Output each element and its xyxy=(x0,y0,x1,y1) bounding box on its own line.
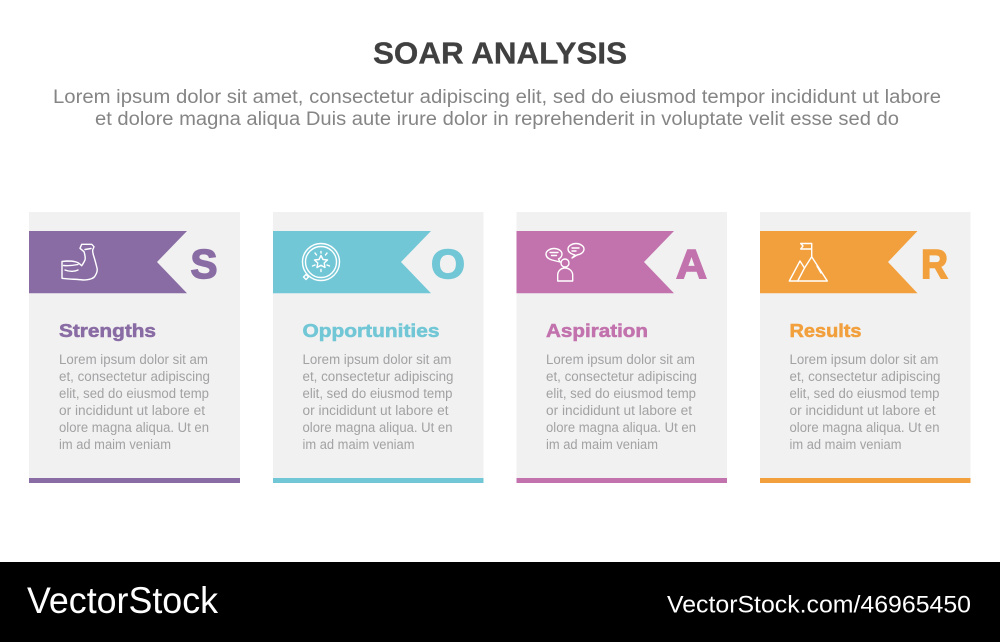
body text: opportunities: et, consectetur adipiscing xyxy=(302,369,454,384)
body text: results: olore magna aliqua. Ut en xyxy=(790,420,940,435)
ribbon: aspiration xyxy=(516,231,674,293)
body text: strengths: elit, sed do eiusmod temp xyxy=(59,386,209,401)
heading: aspiration: Aspiration xyxy=(546,320,648,341)
body text: results: im ad maim veniam xyxy=(790,437,902,452)
body text: strengths xyxy=(59,352,210,452)
ribbon: opportunities xyxy=(273,231,431,293)
heading: results: Results xyxy=(790,320,862,341)
body text: aspiration: Lorem ipsum dolor sit am xyxy=(546,352,695,367)
body text: aspiration: elit, sed do eiusmod temp xyxy=(546,386,696,401)
icon: person with speech bubbles xyxy=(546,244,584,281)
footer bar xyxy=(0,562,1000,642)
subtitle text: et dolore magna aliqua Duis aute irure dolor in reprehenderit in voluptate velit esse sed do xyxy=(95,109,899,130)
body text: strengths: or incididunt ut labore et xyxy=(59,403,205,418)
body text: aspiration: olore magna aliqua. Ut en xyxy=(546,420,696,435)
body text: aspiration: im ad maim veniam xyxy=(546,437,658,452)
body text: strengths: et, consectetur adipiscing xyxy=(59,369,210,384)
body text: opportunities: im ad maim veniam xyxy=(302,437,414,452)
letter A: A xyxy=(676,241,707,287)
body text: strengths: olore magna aliqua. Ut en xyxy=(59,420,209,435)
body text: results: Lorem ipsum dolor sit am xyxy=(790,352,938,367)
body text: results: elit, sed do eiusmod temp xyxy=(790,386,940,401)
body text: aspiration: et, consectetur adipiscing xyxy=(546,369,697,384)
body text: aspiration: or incididunt ut labore et xyxy=(546,403,692,418)
ribbon: results xyxy=(760,231,918,293)
body text: strengths: Lorem ipsum dolor sit am xyxy=(59,352,208,367)
letter R: R xyxy=(921,241,948,287)
panel: opportunities xyxy=(273,212,484,483)
letter S: S xyxy=(190,241,218,287)
body text: opportunities: elit, sed do eiusmod temp xyxy=(302,386,452,401)
letter O: O xyxy=(431,241,465,287)
body text: aspiration xyxy=(546,352,697,452)
footer url text: VectorStock.com/46965450 xyxy=(667,592,971,618)
panel: aspiration xyxy=(516,212,727,483)
subtitle text xyxy=(53,87,941,130)
icon: mountain with flag xyxy=(789,244,827,281)
body text: strengths: im ad maim veniam xyxy=(59,437,171,452)
body text: opportunities xyxy=(302,352,454,452)
panel: results xyxy=(760,212,970,483)
heading: opportunities: Opportunities xyxy=(302,320,440,341)
body text: opportunities: Lorem ipsum dolor sit am xyxy=(302,352,452,367)
subtitle text: Lorem ipsum dolor sit amet, consectetur adipiscing elit, sed do eiusmod tempor incididunt ut labore xyxy=(53,87,941,108)
body text: opportunities: olore magna aliqua. Ut en xyxy=(302,420,452,435)
icon: flexed arm xyxy=(62,244,97,280)
ribbon: strengths xyxy=(29,231,187,293)
panel: strengths xyxy=(29,212,240,483)
icon: magnifier with star xyxy=(302,244,340,280)
body text: results: or incididunt ut labore et xyxy=(790,403,936,418)
footer logo text: VectorStock xyxy=(27,580,218,621)
heading: strengths: Strengths xyxy=(59,320,156,341)
body text: results: et, consectetur adipiscing xyxy=(790,369,940,384)
body text: opportunities: or incididunt ut labore et xyxy=(302,403,449,418)
title: SOAR ANALYSIS xyxy=(373,36,627,70)
body text: results xyxy=(790,352,940,452)
